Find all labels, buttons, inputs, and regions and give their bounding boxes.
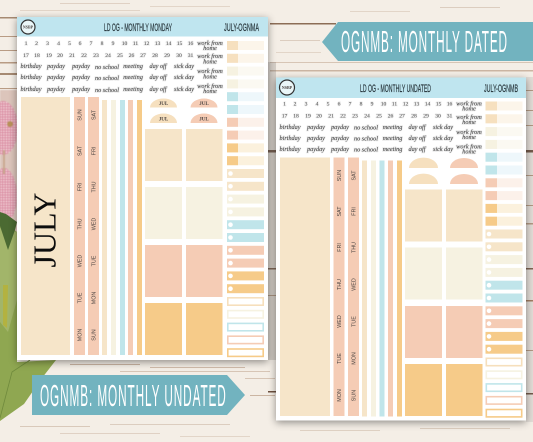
weekday strip 2: MON: [352, 352, 358, 365]
event word stickers: work from: [456, 129, 482, 136]
blank month panel: [280, 158, 330, 416]
date numbers: 24: [364, 114, 370, 120]
event word stickers: payday: [330, 124, 349, 131]
event word stickers: no school: [95, 87, 119, 94]
event word stickers: day off: [408, 124, 427, 131]
date numbers: 21: [69, 53, 75, 59]
weekday strip 2: MON: [92, 292, 98, 304]
event word stickers: day off: [408, 146, 427, 153]
date numbers: 10: [122, 41, 128, 47]
sticker sheet: monthly dated (left): [17, 17, 268, 360]
event word stickers: meeting: [123, 74, 143, 81]
event word stickers: work from: [197, 83, 223, 90]
arch stickers: [150, 98, 218, 123]
event word stickers: payday: [330, 146, 349, 153]
event word stickers: meeting: [383, 146, 402, 153]
sheet header: LD OG - MONTHLY UNDATED: [360, 83, 431, 95]
arch stickers: JUL: [199, 102, 209, 107]
date numbers: 13: [155, 41, 160, 47]
date numbers: 11: [392, 102, 397, 108]
date numbers: 6: [338, 102, 341, 108]
date numbers: 16: [188, 41, 194, 47]
event word stickers: work from: [456, 144, 482, 150]
weekday strip 1: [74, 97, 85, 355]
date numbers: 15: [436, 102, 442, 108]
date numbers: 25: [117, 53, 123, 59]
weekday strip 1: WED: [337, 315, 343, 328]
date numbers: 11: [133, 41, 138, 47]
date numbers: 5: [68, 41, 71, 47]
date numbers: 30: [435, 114, 441, 120]
date numbers: 6: [79, 41, 82, 47]
date numbers: 4: [316, 102, 319, 108]
weekday strip 2: [88, 97, 99, 355]
date numbers: 26: [129, 53, 134, 59]
date numbers: 5: [327, 102, 330, 108]
event word stickers: payday: [46, 74, 65, 81]
weekday strip 2: SUN: [92, 329, 98, 341]
weekday strip 1: FRI: [337, 243, 343, 252]
arch stickers: [409, 158, 478, 184]
date numbers: 8: [101, 41, 104, 47]
weekday strip 2: FRI: [352, 207, 358, 216]
date numbers: 23: [352, 114, 358, 120]
event word stickers: no school: [354, 146, 378, 154]
weekday strip 2: WED: [92, 218, 98, 230]
date numbers: 30: [176, 53, 182, 59]
date numbers: 2: [294, 102, 297, 108]
weekday strip 1: SUN: [337, 170, 343, 181]
date numbers: 27: [140, 53, 146, 59]
weekday strip 1: [334, 158, 344, 416]
weekday strip 2: SUN: [352, 390, 358, 401]
date numbers: 24: [105, 53, 111, 59]
event word stickers: birthday: [280, 135, 301, 142]
date numbers: 17: [23, 53, 29, 59]
date numbers: 16: [447, 102, 452, 108]
sheet header: [17, 17, 268, 36]
date numbers: 12: [144, 41, 150, 47]
date numbers: [282, 102, 452, 120]
event word stickers: payday: [46, 86, 65, 93]
event word stickers: sick day: [433, 135, 453, 142]
sheet header: [276, 78, 526, 98]
event word stickers: meeting: [123, 63, 143, 70]
weekday strip 1: SAT: [78, 145, 84, 156]
event word stickers: work from: [197, 40, 223, 47]
arch stickers: JUL: [199, 118, 209, 122]
date numbers: 25: [376, 114, 382, 120]
event word stickers: day off: [149, 86, 168, 93]
date numbers: 14: [166, 41, 172, 47]
event word stickers: work from: [456, 114, 482, 121]
date numbers: 14: [425, 102, 430, 108]
weekday strip 1: THU: [337, 279, 343, 290]
date numbers: 2: [35, 41, 38, 47]
event word stickers: sick day: [174, 63, 194, 70]
event word stickers: payday: [46, 63, 65, 70]
sheet header: NSBP: [282, 85, 293, 90]
date numbers: 12: [403, 102, 408, 108]
event word stickers: payday: [306, 146, 325, 153]
banner: monthly undated: OGNMB: MONTHLY UNDATED: [40, 378, 226, 413]
weekday strip 1: MON: [78, 329, 84, 341]
event word stickers: no school: [354, 136, 378, 142]
date numbers: 13: [414, 102, 420, 108]
color stripes: [102, 100, 142, 355]
date numbers: 27: [399, 114, 405, 120]
weekday strip 1: WED: [78, 255, 84, 267]
weekday strip 1: FRI: [78, 183, 84, 191]
event word stickers: home: [462, 148, 476, 156]
event word stickers: sick day: [433, 146, 453, 153]
event word stickers: payday: [71, 74, 90, 81]
event word stickers: meeting: [123, 86, 143, 93]
sheet header: LD OG - MONTHLY MONDAY: [104, 22, 172, 34]
event word stickers: payday: [306, 124, 325, 131]
weekday strip 2: TUE: [92, 255, 98, 266]
tab stickers column: [227, 41, 264, 356]
date numbers: [23, 41, 194, 59]
date numbers: 28: [411, 114, 417, 120]
sticker sheet: monthly undated (right): [276, 78, 526, 420]
event word stickers: birthday: [280, 124, 301, 131]
weekday strip 1: TUE: [78, 292, 84, 303]
date numbers: 17: [282, 114, 288, 120]
sheet contents: left: [17, 17, 268, 356]
event word stickers: work from: [197, 53, 223, 60]
weekday strip 2: [348, 158, 359, 416]
date numbers: 20: [316, 114, 322, 120]
event word stickers: [21, 40, 223, 95]
date numbers: 9: [112, 41, 115, 47]
event word stickers: home: [462, 134, 476, 141]
event word stickers: payday: [330, 135, 349, 142]
sheet header: JULY-OGNMA: [224, 22, 259, 34]
date numbers: 18: [34, 53, 40, 59]
event word stickers: payday: [71, 63, 90, 70]
event word stickers: day off: [408, 135, 427, 142]
date numbers: 8: [360, 102, 363, 108]
date numbers: 22: [340, 114, 346, 120]
event word stickers: payday: [306, 135, 325, 142]
event word stickers: work from: [197, 68, 223, 75]
date numbers: 10: [381, 102, 386, 108]
box stickers: [405, 190, 482, 416]
event word stickers: meeting: [383, 135, 402, 142]
event word stickers: no school: [95, 75, 119, 82]
weekday strip 1: THU: [78, 218, 84, 230]
tab stickers column: [486, 102, 522, 417]
event word stickers: payday: [71, 86, 90, 93]
date numbers: 9: [371, 102, 374, 108]
date numbers: 4: [57, 41, 60, 47]
weekday strip 1: MON: [337, 389, 343, 402]
date numbers: 31: [447, 114, 452, 120]
date numbers: 7: [90, 41, 93, 47]
weekday strip 1: SUN: [78, 109, 84, 121]
date numbers: 26: [388, 114, 394, 120]
event word stickers: birthday: [21, 86, 42, 93]
color stripes: [362, 160, 402, 416]
event word stickers: no school: [95, 64, 119, 71]
event word stickers: home: [462, 119, 476, 126]
date numbers: 20: [57, 53, 63, 59]
event word stickers: home: [203, 74, 217, 80]
weekday strip 1: TUE: [337, 353, 343, 364]
date numbers: 3: [305, 102, 308, 108]
date numbers: 15: [177, 41, 182, 47]
date numbers: 19: [305, 114, 311, 120]
event word stickers: day off: [149, 63, 168, 70]
date numbers: 1: [25, 41, 28, 47]
sheet header: NSBP: [23, 24, 34, 30]
event word stickers: work from: [456, 100, 482, 108]
event word stickers: sick day: [174, 74, 194, 81]
weekday strip 2: SAT: [92, 109, 98, 120]
arch stickers: JUL: [159, 118, 169, 122]
weekday strip 1: SAT: [337, 206, 343, 217]
weekday strip 2: FRI: [92, 147, 98, 155]
event word stickers: [280, 100, 482, 156]
event word stickers: home: [203, 45, 217, 52]
event word stickers: home: [203, 88, 217, 95]
date numbers: 7: [349, 102, 352, 108]
event word stickers: meeting: [383, 124, 402, 131]
event word stickers: home: [462, 106, 476, 112]
event word stickers: birthday: [21, 74, 42, 81]
date numbers: 31: [188, 53, 194, 59]
date numbers: 18: [293, 114, 299, 120]
event word stickers: sick day: [174, 86, 194, 93]
weekday strip 2: THU: [92, 181, 98, 193]
banner: monthly dated: OGNMB: MONTHLY DATED: [341, 24, 507, 59]
date numbers: 22: [81, 53, 87, 59]
date numbers: 1: [283, 102, 286, 108]
weekday strip 2: WED: [352, 278, 358, 291]
date numbers: 28: [152, 53, 158, 59]
date numbers: 19: [46, 53, 52, 59]
banner: monthly dated: [322, 22, 533, 61]
weekday strip 2: SAT: [352, 170, 358, 181]
event word stickers: birthday: [21, 63, 42, 70]
date numbers: 23: [93, 53, 99, 59]
box stickers: [145, 129, 222, 355]
event word stickers: sick day: [433, 124, 453, 131]
sheet contents: right: [276, 78, 526, 417]
date numbers: 29: [164, 53, 170, 59]
event word stickers: home: [203, 58, 217, 66]
month panel: July: [21, 97, 70, 355]
month panel: July: JULY: [26, 192, 62, 268]
date numbers: 3: [46, 41, 49, 47]
weekday strip 2: THU: [352, 242, 358, 253]
weekday strip 2: TUE: [352, 316, 358, 327]
decoration: green leaves: [0, 212, 56, 421]
event word stickers: no school: [354, 124, 378, 132]
date numbers: 29: [423, 114, 429, 120]
event word stickers: birthday: [280, 146, 301, 153]
event word stickers: day off: [149, 74, 168, 81]
arch stickers: JUL: [159, 102, 169, 107]
date numbers: 21: [328, 114, 334, 120]
decoration: pink flowers: [0, 90, 18, 240]
